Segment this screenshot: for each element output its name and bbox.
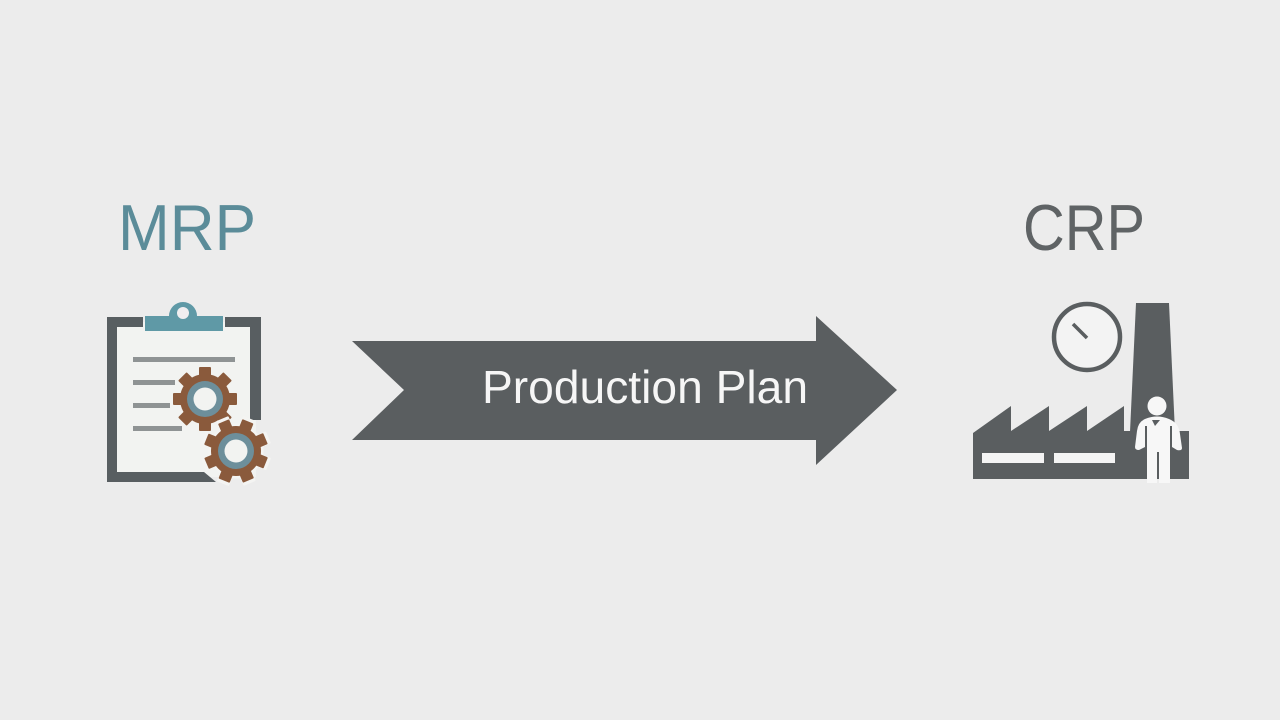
- factory windows: [982, 453, 1115, 463]
- heading: CRP: CRP: [1023, 191, 1145, 264]
- gear: upper: [173, 367, 237, 431]
- clipboard paper: [112, 322, 256, 477]
- heading: MRP: MRP: [118, 191, 256, 264]
- gap beside chimney: [1124, 400, 1130, 431]
- arrow label: Production Plan: [482, 361, 808, 413]
- factory building: [973, 406, 1189, 479]
- clock: [1054, 304, 1120, 370]
- worker: [1135, 396, 1182, 483]
- icon: factory with clock and worker: [973, 303, 1189, 483]
- gear: lower: [190, 405, 282, 497]
- text lines: [133, 357, 235, 431]
- chimney: [1130, 303, 1175, 432]
- clipboard clip: [145, 302, 223, 331]
- icon: clipboard with gears: [107, 302, 282, 497]
- clipboard frame: [107, 317, 261, 482]
- arrow: production plan: [352, 316, 897, 465]
